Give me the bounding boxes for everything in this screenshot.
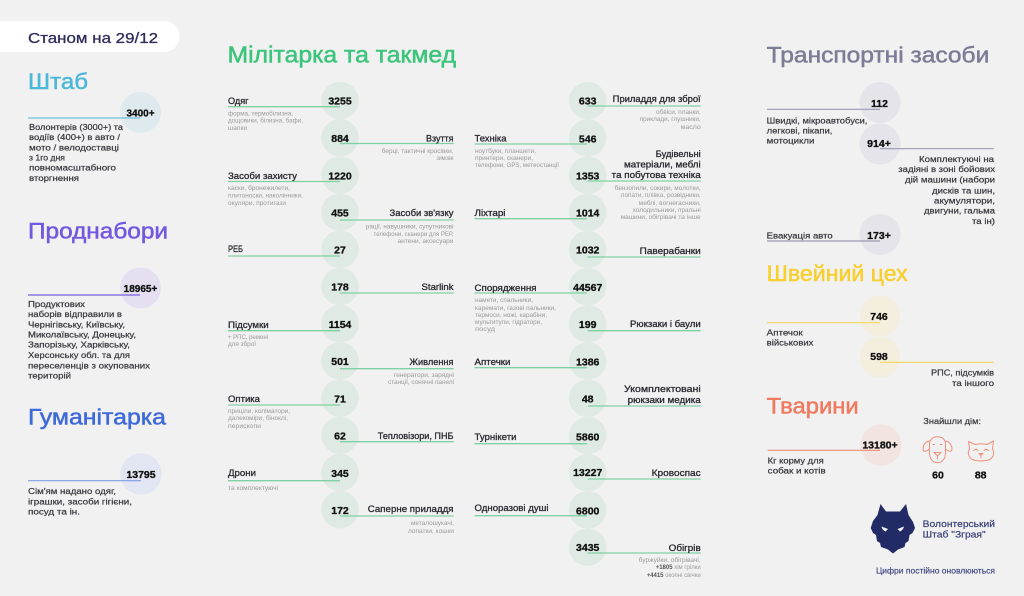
stat: швейний 746 xyxy=(767,296,900,348)
stat: транспорт 112: мотоцикли xyxy=(767,136,815,146)
item: Ліхтарі: 1014 xyxy=(576,208,600,220)
item: Спорядження: намети, спальники, xyxy=(475,298,533,304)
stat: швейний 746: 746 xyxy=(870,311,888,323)
item: Засоби зв'язку: рації, навушники, супутникові xyxy=(366,225,454,231)
item: РЕБ: 27 xyxy=(334,245,346,257)
date pill xyxy=(0,21,179,52)
item: Тепловізори, ПНБ xyxy=(321,417,454,454)
item: Спорядження: посуд xyxy=(475,327,496,333)
label: Знайшли дім: Знайшли дім: xyxy=(923,416,981,426)
item: Укомплектовані рюкзаки медика xyxy=(569,380,701,417)
item: Паверабанки: Паверабанки xyxy=(640,246,701,256)
item: Одноразові душі: Одноразові душі xyxy=(474,503,548,513)
item: Обігрів: Обігрів xyxy=(669,543,701,553)
stat: транспорт 173+: 173+ xyxy=(867,230,891,242)
stat: Штаб 3400+: Волонтерів (3000+) та xyxy=(29,122,123,132)
stat: швейний 746: Аптечок xyxy=(767,327,803,337)
item: Саперне приладдя: Саперне приладдя xyxy=(368,504,454,514)
stat: Штаб 3400+: водіїв (400+) в авто / xyxy=(29,132,121,142)
stat: транспорт 112: легкові, пікапи, xyxy=(767,126,832,136)
item: Одяг: шапки xyxy=(228,126,247,132)
stat: швейний 746: військових xyxy=(767,338,814,348)
item: Одноразові душі: 6800 xyxy=(576,506,600,518)
heading: Мілітарка та такмед: Мілітарка та такмед xyxy=(228,42,457,68)
stat: Гуманітарка 13795: іграшки, засоби гігієни, xyxy=(28,496,132,506)
item: Будівельні матеріали: лопати, плівка, розвідники, xyxy=(621,193,701,199)
stat: Проднабори 18965+: Продуктових xyxy=(28,299,86,309)
heading: Тварини: Тварини xyxy=(767,394,859,419)
item: Взуття: Взуття xyxy=(426,134,454,144)
item: Засоби захисту: окуляри, протигази xyxy=(228,201,286,207)
item: Спорядження: термоси, ножі, карабіни, xyxy=(475,313,547,319)
item: Саперне приладдя xyxy=(321,491,454,535)
stat: транспорт 112: Швидкі, мікроавтобуси, xyxy=(767,116,867,126)
number: dogs 60: 60 xyxy=(932,470,944,482)
item: Будівельні матеріали: меблі, вогнегасники, xyxy=(639,201,701,207)
logo text xyxy=(923,519,995,540)
item: Обігрів: +4415 окопні свічки xyxy=(647,573,701,579)
item: Будівельні матеріали: бензопили, сокири, молотки, xyxy=(615,186,701,192)
item: Спорядження: каремати, газові пальники, xyxy=(475,306,556,312)
stat: транспорт 112: 112 xyxy=(871,98,888,110)
stat: транспорт 914+ xyxy=(860,124,996,226)
item: Одяг: форма, термобілизна, xyxy=(228,112,293,118)
stat: тварини 13180+: 13180+ xyxy=(862,440,898,452)
item: Засоби захисту: Засоби захисту xyxy=(228,171,298,181)
item: Приладдя для зброї: обвіси, планки, xyxy=(656,110,701,116)
stat: Штаб 3400+: мото / велодоставці xyxy=(29,142,119,152)
stat: Проднабори 18965+: Чернігівську, Київську, xyxy=(28,319,125,329)
item: Кровоспас: Кровоспас xyxy=(652,468,701,478)
item: Підсумки xyxy=(228,305,359,348)
icon: cat xyxy=(968,441,994,461)
item: Засоби зв'язку: Засоби зв'язку xyxy=(390,208,454,218)
item: Підсумки: Підсумки xyxy=(228,320,269,330)
item: Обігрів xyxy=(569,528,701,579)
item: Засоби захисту xyxy=(228,156,359,207)
item: Укомплектовані рюкзаки медика: рюкзаки медика xyxy=(628,395,701,405)
item: Взуття: берці, тактичні кросівки, xyxy=(382,149,454,155)
item: Техніка: ноутбуки, планшети, xyxy=(475,149,536,155)
item: Паверабанки xyxy=(569,231,701,268)
item: Оптика: Оптика xyxy=(228,394,260,404)
item: Спорядження xyxy=(474,268,606,333)
item: Засоби зв'язку xyxy=(321,193,454,245)
item: Спорядження: 44567 xyxy=(573,282,602,294)
date pill: Станом на 29/12 xyxy=(28,30,158,47)
item: Живлення: Живлення xyxy=(410,357,454,367)
item: Дрони: та комплектуючі xyxy=(228,486,278,492)
item: Оптика xyxy=(228,379,359,430)
stat: швейний 598: РПС, підсумків xyxy=(931,368,995,378)
item: Кровоспас: 13227 xyxy=(573,467,602,479)
logo: wolf xyxy=(871,504,915,554)
item: Тепловізори, ПНБ: Тепловізори, ПНБ xyxy=(378,431,454,441)
item: Оптика: перископи xyxy=(228,424,261,430)
stat: Проднабори 18965+: Херсонську обл. та для xyxy=(28,350,130,360)
stat: Гуманітарка 13795: 13795 xyxy=(126,469,156,481)
column: military items left xyxy=(228,82,454,535)
item: Оптика: далекоміри, біноклі, xyxy=(228,416,288,422)
item: Ліхтарі: Ліхтарі xyxy=(474,208,506,218)
item: РЕБ xyxy=(228,231,359,268)
item: Starlink xyxy=(321,268,454,305)
item: Техніка: телефони, GPS, метеостанції xyxy=(475,163,559,169)
item: Аптечки xyxy=(474,342,606,380)
logo text: Волонтерський xyxy=(923,519,995,530)
stat: транспорт 914+: акумулятори, xyxy=(934,196,995,206)
stat: тварини 13180+: Кг корму для xyxy=(768,456,824,466)
stat: транспорт 173+: Евакуація авто xyxy=(767,231,833,241)
item: Starlink: 178 xyxy=(331,282,349,294)
item: Приладдя для зброї: приклади, глушники, xyxy=(640,117,701,123)
item: Спорядження: мультитули, гідратори, xyxy=(475,320,542,326)
item: Starlink: Starlink xyxy=(422,282,454,292)
stat: Проднабори 18965+: наборів відправили в xyxy=(28,309,123,319)
item: Засоби зв'язку: 455 xyxy=(331,208,349,220)
item: Засоби захисту: 1220 xyxy=(328,170,352,182)
item: Будівельні матеріали: машини, обігрівачі та інше xyxy=(621,215,701,221)
stat: Гуманітарка 13795: посуд та ін. xyxy=(28,507,80,517)
item: Оптика: 71 xyxy=(334,394,346,406)
stat: Проднабори 18965+: територій xyxy=(28,370,71,380)
item: Живлення: станції, сонячні панелі xyxy=(388,380,454,386)
item: Обігрів: +1805 хім грілки xyxy=(656,565,701,571)
stat: тварини 13180+ xyxy=(768,424,902,476)
stat: Проднабори 18965+: переселенців з окупованих xyxy=(28,360,151,370)
heading: Швейний цех: Швейний цех xyxy=(767,261,908,286)
stat: транспорт 914+: Комплектуючі на xyxy=(919,154,994,164)
item: Саперне приладдя: 172 xyxy=(331,505,349,517)
item: Рюкзаки і баули: Рюкзаки і баули xyxy=(630,319,701,329)
item: Будівельні матеріали: холодильники, пральні xyxy=(633,208,701,214)
item: Приладдя для зброї: Приладдя для зброї xyxy=(613,94,701,104)
item: Дрони: 345 xyxy=(331,468,349,480)
stat: Штаб 3400+: 3400+ xyxy=(126,108,155,120)
heading: Транспортні засоби: Транспортні засоби xyxy=(767,42,989,67)
item: Будівельні матеріали: матеріали, меблі xyxy=(624,159,701,169)
stat: тварини 13180+: собак и котів xyxy=(768,466,826,476)
item: Засоби захисту: каски, бронежилети, xyxy=(228,186,290,192)
footnote: Цифри постійно оновлюються xyxy=(876,566,995,576)
item: Тепловізори, ПНБ: 62 xyxy=(334,430,346,442)
heading: Проднабори: Проднабори xyxy=(28,218,168,244)
stat: транспорт 914+: задіяні в зоні бойових xyxy=(898,164,996,174)
stat: Штаб 3400+: з 1го дня xyxy=(29,152,65,162)
item: Живлення: генератори, зарядні xyxy=(394,373,454,379)
stat: Проднабори 18965+: Запорізьку, Харківську, xyxy=(28,340,130,350)
item: Дрони: Дрони xyxy=(228,468,256,478)
item: Обігрів: буржуйки, обігрівачі, xyxy=(639,557,701,564)
item: Кровоспас xyxy=(569,454,701,491)
item: Приладдя для зброї: масло xyxy=(681,125,701,131)
item: Техніка: 546 xyxy=(579,134,597,146)
stat: транспорт 914+: дій машини (набори xyxy=(905,175,995,185)
heading: Гуманітарка: Гуманітарка xyxy=(28,404,167,429)
item: Саперне приладдя: лопатки, кошки xyxy=(408,529,454,535)
item: Паверабанки: 1032 xyxy=(576,245,600,257)
item: Рюкзаки і баули: 199 xyxy=(579,319,597,331)
item: Аптечки: Аптечки xyxy=(474,357,510,367)
stat: Проднабори 18965+: 18965+ xyxy=(124,284,157,295)
logo text: Штаб "Зграя" xyxy=(923,530,986,540)
heading: Штаб: Штаб xyxy=(28,69,88,94)
item: Засоби захисту: плитоноски, наколінники, xyxy=(228,194,303,200)
item: Приладдя для зброї: 633 xyxy=(579,96,597,108)
stat: транспорт 914+: 914+ xyxy=(867,138,891,150)
item: Турнікети: 5860 xyxy=(576,431,600,443)
item: РЕБ: РЕБ xyxy=(228,244,243,254)
column: military items right xyxy=(474,82,701,579)
stat: швейний 598: 598 xyxy=(870,351,888,363)
item: Обігрів: 3435 xyxy=(576,542,600,554)
stat: Штаб 3400+: повномасштабного xyxy=(29,163,116,173)
stat: Штаб 3400+ xyxy=(28,92,161,183)
item: Будівельні матеріали: та побутова техніка xyxy=(612,170,701,180)
item: Укомплектовані рюкзаки медика: 48 xyxy=(582,394,594,406)
item: Одяг: 3255 xyxy=(328,96,352,108)
item: Засоби зв'язку: телефони, сканери для РЕР, xyxy=(374,232,454,238)
item: Саперне приладдя: металошукачі, xyxy=(411,521,454,527)
item: Ліхтарі xyxy=(474,194,606,231)
item: Засоби зв'язку: антени, аксесуари xyxy=(398,239,454,245)
item: Взуття: 884 xyxy=(331,133,349,145)
item: Одяг xyxy=(228,82,359,132)
stat: Штаб 3400+: вторгнення xyxy=(29,173,79,183)
item: Підсумки: для зброї xyxy=(228,342,256,348)
item: Підсумки: 1154 xyxy=(329,319,352,331)
item: Будівельні матеріали: 1353 xyxy=(576,170,600,182)
item: Техніка xyxy=(474,119,606,169)
item: Оптика: приціли, коліматори, xyxy=(228,409,290,415)
item: Будівельні матеріали: Будівельні xyxy=(656,149,701,159)
item: Одноразові душі xyxy=(474,491,606,529)
item: Взуття: зимове xyxy=(436,156,454,162)
stat: Проднабори 18965+ xyxy=(28,268,161,380)
stat: Гуманітарка 13795: Сім'ям надано одяг, xyxy=(28,486,116,496)
item: Турнікети xyxy=(474,417,606,454)
item: Спорядження: Спорядження xyxy=(474,283,537,293)
item: Взуття xyxy=(321,119,454,162)
item: Одяг: Одяг xyxy=(228,96,249,106)
stat: транспорт 112 xyxy=(767,82,900,146)
item: Приладдя для зброї xyxy=(569,82,701,131)
icon: dog xyxy=(923,437,952,463)
stat: транспорт 914+: дисків та шин, xyxy=(932,185,995,195)
stat: транспорт 914+: двигуни, гальма xyxy=(924,206,995,216)
item: Дрони xyxy=(228,454,359,492)
item: Турнікети: Турнікети xyxy=(474,432,516,442)
number: cats 88: 88 xyxy=(975,470,987,482)
item: Техніка: принтери, сканери, xyxy=(475,156,533,162)
item: Аптечки: 1386 xyxy=(576,356,600,368)
item: Рюкзаки і баули xyxy=(569,305,701,343)
item: Одяг: дощовики, білизна, бафи, xyxy=(228,119,303,125)
item: Техніка: Техніка xyxy=(474,134,506,144)
stat: Гуманітарка 13795 xyxy=(28,453,162,517)
stat: транспорт 173+ xyxy=(767,214,900,255)
item: Підсумки: + РПС, ремені xyxy=(228,335,268,341)
stat: швейний 598: та іншого xyxy=(952,378,994,388)
stat: транспорт 914+: та ін) xyxy=(972,216,995,226)
stat: Проднабори 18965+: Миколаївську, Донецьку, xyxy=(28,330,136,340)
item: Живлення xyxy=(321,342,454,386)
item: Укомплектовані рюкзаки медика: Укомплектовані xyxy=(624,384,701,394)
stat: швейний 598 xyxy=(860,336,995,388)
item: Будівельні матеріали xyxy=(569,149,701,221)
item: Живлення: 501 xyxy=(331,356,349,368)
